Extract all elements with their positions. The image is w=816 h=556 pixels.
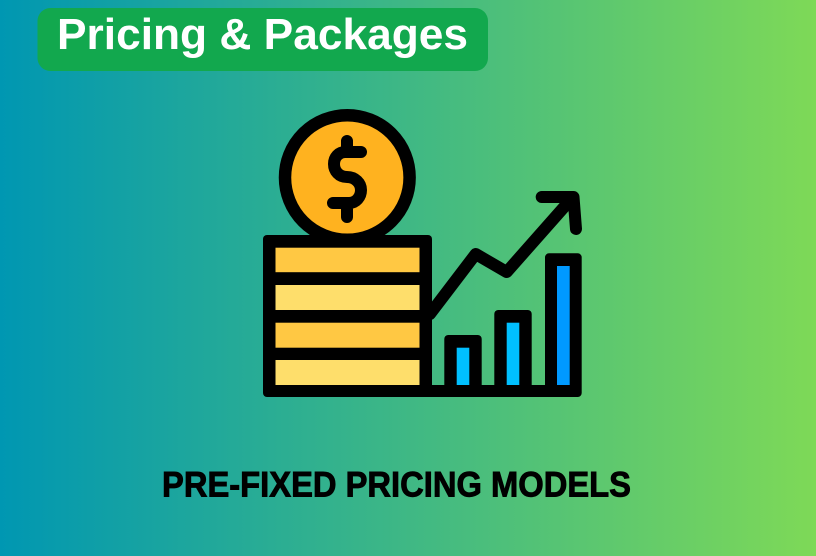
icon: coin stack xyxy=(263,235,432,397)
icon: dollar coin xyxy=(285,115,410,240)
caption: PRE-FIXED PRICING MODELS xyxy=(162,466,631,504)
bar chart xyxy=(425,253,582,397)
arrow: rising trend line xyxy=(430,197,576,314)
title: Pricing & Packages xyxy=(57,10,468,59)
title badge xyxy=(38,8,488,71)
icon: coin stack with growth chart xyxy=(263,115,582,397)
